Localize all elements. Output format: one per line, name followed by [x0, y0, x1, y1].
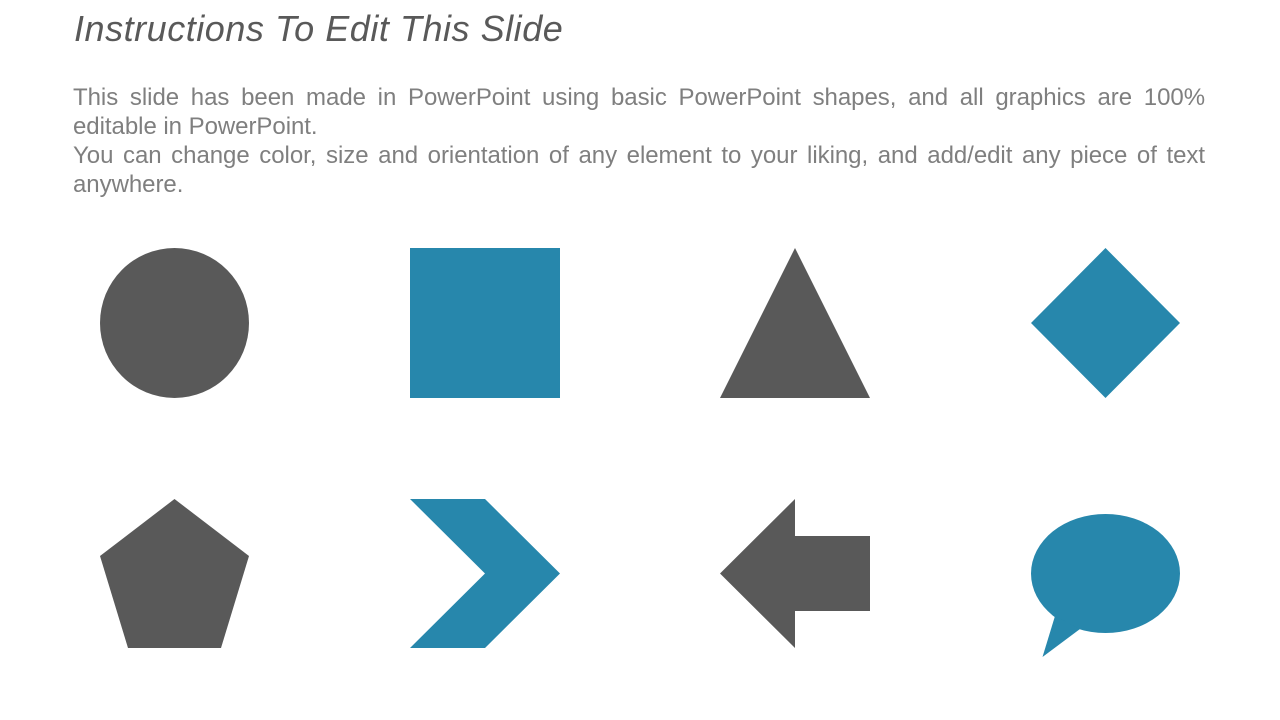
icon: blue diamond	[1031, 248, 1180, 398]
icon: grey pentagon	[100, 499, 249, 648]
instructions text block: This slide has been made in PowerPoint using basic PowerPoint shapes, and all graphics are 100% editable in PowerPoint.	[73, 84, 1205, 140]
icon: grey triangle	[720, 248, 870, 398]
instructions text block	[73, 84, 1205, 198]
icon: blue speech bubble	[1031, 514, 1180, 657]
title: Instructions To Edit This Slide	[74, 8, 563, 49]
icon: grey left arrow	[720, 499, 870, 648]
icon: blue chevron	[410, 499, 560, 648]
icon: grey circle	[100, 248, 249, 398]
instructions text block: You can change color, size and orientation of any element to your liking, and add/edit any piece of text anywhere.	[73, 142, 1205, 198]
icon: blue square	[410, 248, 560, 398]
